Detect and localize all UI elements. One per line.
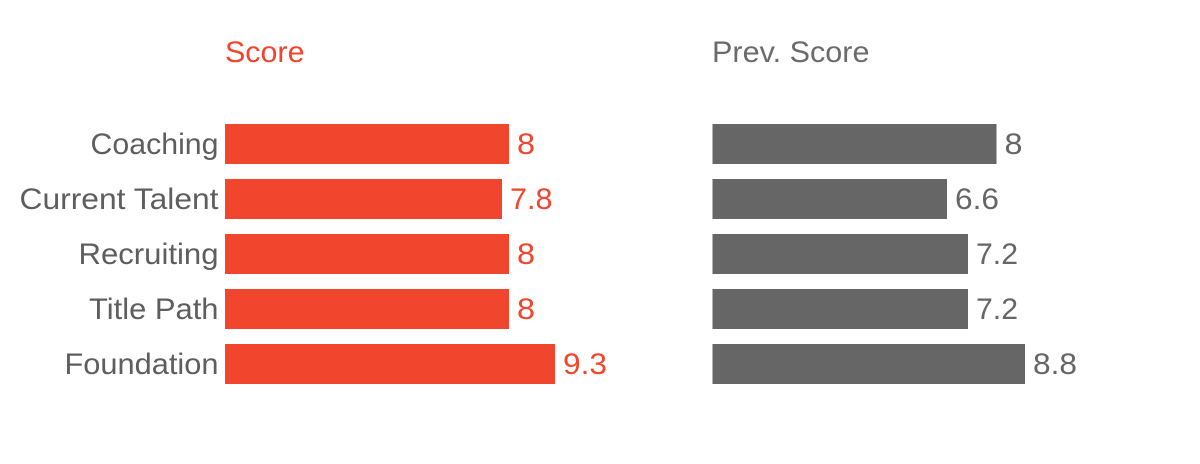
bar chart: Score: 9.3: [563, 348, 607, 381]
bar chart: Prev. Score: 8: [1004, 128, 1022, 161]
bar chart: Score: [225, 124, 607, 384]
heading: Prev. Score: Prev. Score: [712, 36, 870, 69]
heading: Score: Score: [225, 36, 304, 69]
bar chart: Prev. Score: 7.2: [976, 293, 1018, 326]
category labels: [20, 128, 219, 381]
category labels: Coaching: [90, 128, 218, 161]
bar chart: Prev. Score: 6.6: [955, 183, 999, 216]
bar chart: Score: 7.8: [510, 183, 552, 216]
bar chart: Score: 8: [517, 128, 535, 161]
category labels: Title Path: [89, 293, 218, 326]
bar chart: Prev. Score: 7.2: [976, 238, 1018, 271]
bar chart: Prev. Score: 8.8: [1033, 348, 1077, 381]
category labels: Recruiting: [78, 238, 218, 271]
bar chart: Prev. Score: [712, 124, 1077, 384]
category labels: Foundation: [64, 348, 218, 381]
bar chart: Score: 8: [517, 238, 535, 271]
bar chart: Score: 8: [517, 293, 535, 326]
category labels: Current Talent: [20, 183, 219, 216]
